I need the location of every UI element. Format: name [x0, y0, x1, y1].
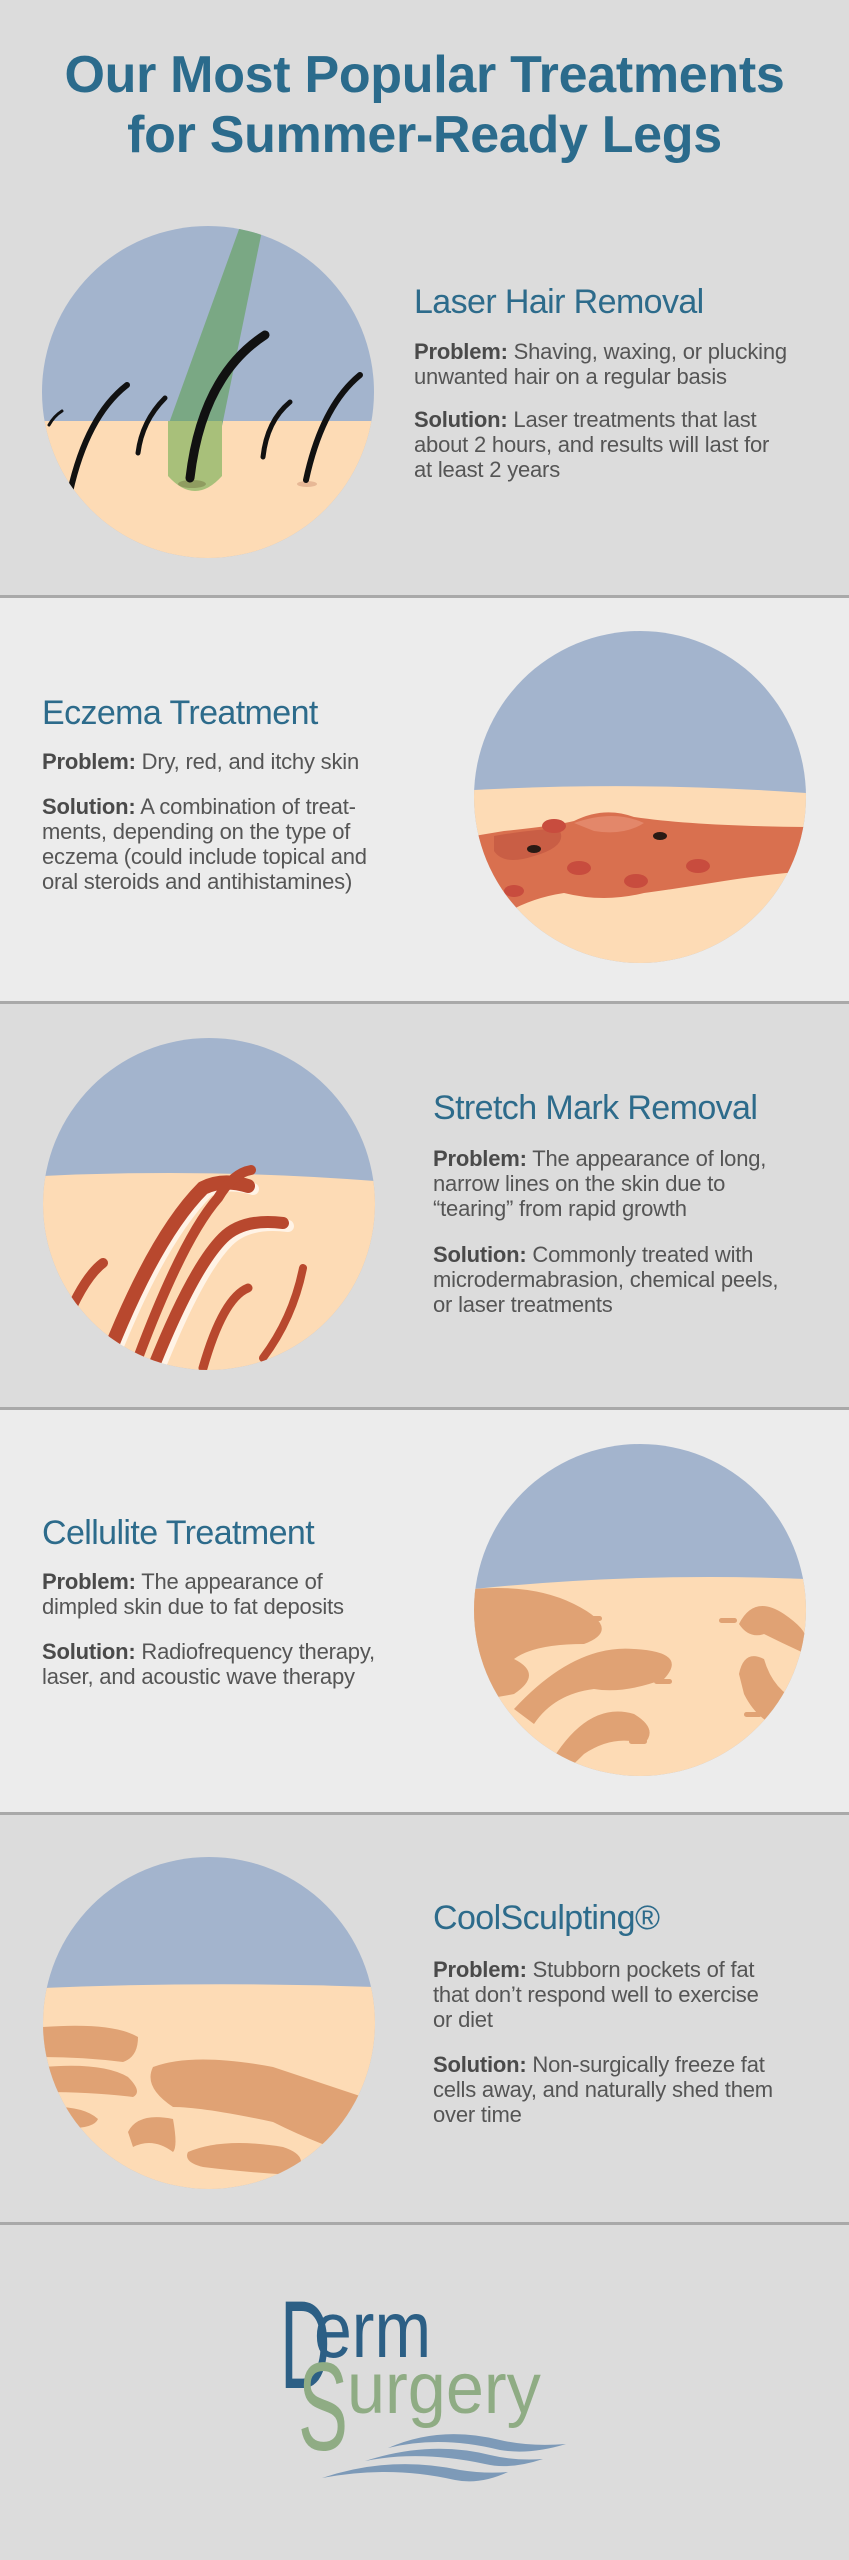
heading: laser hair removal: Laser Hair Removal [414, 283, 704, 321]
title: for Summer-Ready Legs [127, 106, 722, 164]
title [64, 46, 785, 164]
text: stretch solution [433, 1242, 778, 1317]
logo waves [322, 2434, 566, 2481]
text: eczema solution: Solution: A combination of treat- [42, 794, 356, 819]
text: coolsculpting problem: or diet [433, 2007, 493, 2032]
text: stretch solution: microdermabrasion, chemical peels, [433, 1267, 778, 1292]
logo: DermSurgery: urgery [347, 2347, 541, 2428]
text: stretch problem: narrow lines on the skin due to [433, 1171, 725, 1196]
text: stretch problem: “tearing” from rapid growth [433, 1196, 687, 1221]
text: laser solution [414, 407, 769, 482]
text: coolsculpting solution: over time [433, 2102, 522, 2127]
illustration: cellulite [474, 1444, 806, 1776]
text: eczema solution: eczema (could include topical and [42, 844, 367, 869]
text: cellulite problem [42, 1569, 344, 1619]
illustration: coolsculpting [43, 1857, 375, 2189]
logo: DermSurgery [280, 2290, 566, 2482]
text: coolsculpting problem [433, 1957, 759, 2032]
text: stretch problem [433, 1146, 766, 1221]
text: coolsculpting solution [433, 2052, 773, 2127]
text: cellulite problem: Problem: The appearance of [42, 1569, 323, 1594]
text: cellulite solution: laser, and acoustic wave therapy [42, 1664, 355, 1689]
text: cellulite solution: Solution: Radiofrequency therapy, [42, 1639, 375, 1664]
heading: coolsculpting: CoolSculpting® [433, 1899, 659, 1937]
text: eczema problem: Problem: Dry, red, and itchy skin [42, 749, 359, 774]
text: laser problem [414, 339, 787, 389]
text: coolsculpting solution: cells away, and naturally shed them [433, 2077, 773, 2102]
logo: DermSurgery: S [298, 2337, 348, 2477]
heading: stretch marks: Stretch Mark Removal [433, 1089, 757, 1127]
text: stretch solution: Solution: Commonly treated with [433, 1242, 753, 1267]
text: stretch problem: Problem: The appearance of long, [433, 1146, 766, 1171]
text: laser solution: at least 2 years [414, 457, 560, 482]
illustration: laser hair removal [42, 226, 374, 558]
text: eczema solution: ments, depending on the type of [42, 819, 350, 844]
text: laser problem: Problem: Shaving, waxing, or plucking [414, 339, 787, 364]
text: cellulite solution [42, 1639, 375, 1689]
title: Our Most Popular Treatments [64, 46, 785, 104]
illustration: stretch marks [43, 1038, 375, 1370]
heading: eczema: Eczema Treatment [42, 694, 318, 732]
text: laser problem: unwanted hair on a regular basis [414, 364, 727, 389]
text: cellulite problem: dimpled skin due to fat deposits [42, 1594, 344, 1619]
heading: cellulite: Cellulite Treatment [42, 1514, 314, 1552]
text: eczema solution [42, 794, 367, 894]
text: coolsculpting problem: Problem: Stubborn pockets of fat [433, 1957, 754, 1982]
text: eczema solution: oral steroids and antihistamines) [42, 869, 352, 894]
text: laser solution: about 2 hours, and results will last for [414, 432, 769, 457]
text: coolsculpting problem: that don’t respond well to exercise [433, 1982, 759, 2007]
illustration: eczema [474, 631, 806, 963]
text: laser solution: Solution: Laser treatments that last [414, 407, 756, 432]
text: stretch solution: or laser treatments [433, 1292, 613, 1317]
text: coolsculpting solution: Solution: Non-surgically freeze fat [433, 2052, 765, 2077]
